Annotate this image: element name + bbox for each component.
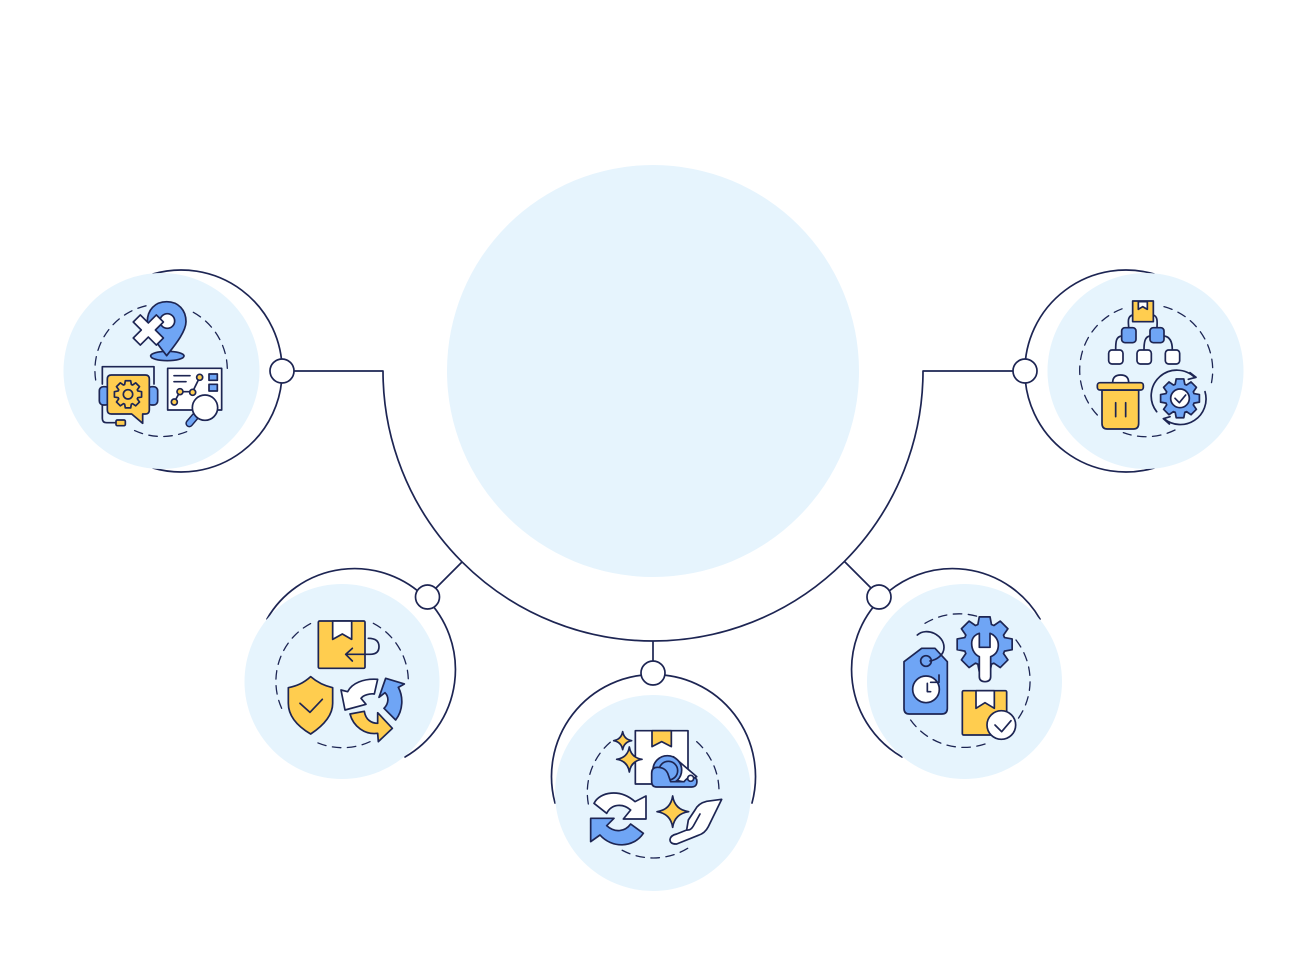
step 5 outline ring xyxy=(1025,270,1154,472)
icon: gear with check xyxy=(1151,370,1206,425)
icon: gear with wrench xyxy=(957,617,1012,682)
icon: exchange arrows xyxy=(591,793,646,845)
icon: returned parcel xyxy=(318,621,379,668)
icon: map pin with cross xyxy=(125,302,186,361)
step 2 outline ring xyxy=(267,569,455,757)
icon: parcel hierarchy xyxy=(1109,301,1180,364)
step 5 background disc xyxy=(1048,273,1244,469)
icon: trash bin xyxy=(1097,375,1143,429)
icon: parcel with tape dispenser xyxy=(635,731,697,787)
step 4 icon xyxy=(904,614,1030,747)
step 2 xyxy=(244,569,455,779)
icon: cycle arrows xyxy=(341,678,404,742)
step 5 xyxy=(1013,270,1244,472)
main connector arc xyxy=(293,371,1014,661)
icon: chart with magnifier xyxy=(168,368,222,423)
icon: price tag with clock xyxy=(904,632,947,714)
step 1 background disc xyxy=(64,273,260,469)
icon: support chat with gear xyxy=(99,367,158,426)
step 2 background disc xyxy=(244,584,440,779)
step 4 xyxy=(852,569,1062,779)
step 1 xyxy=(64,270,294,472)
step 1 node xyxy=(270,359,294,383)
step 4 outline ring xyxy=(852,569,1040,757)
step 2 node xyxy=(416,585,440,609)
step 2 icon xyxy=(276,621,408,748)
step 3 xyxy=(552,661,756,891)
step 4 node xyxy=(867,585,891,609)
step 5 node xyxy=(1013,359,1037,383)
step 5 icon xyxy=(1080,301,1213,437)
icon: sparkles xyxy=(614,732,689,827)
step 1 outline ring xyxy=(153,270,282,472)
step 1 icon xyxy=(95,302,227,436)
central circle xyxy=(447,165,859,577)
step 3 outline ring xyxy=(552,675,756,803)
step 4 background disc xyxy=(867,584,1062,779)
step 3 icon xyxy=(587,731,722,858)
icon: open hand xyxy=(670,799,722,844)
icon: parcel with check xyxy=(962,691,1016,739)
icon: shield with check xyxy=(288,677,333,734)
step 3 node xyxy=(641,661,665,685)
step 3 background disc xyxy=(555,695,751,891)
